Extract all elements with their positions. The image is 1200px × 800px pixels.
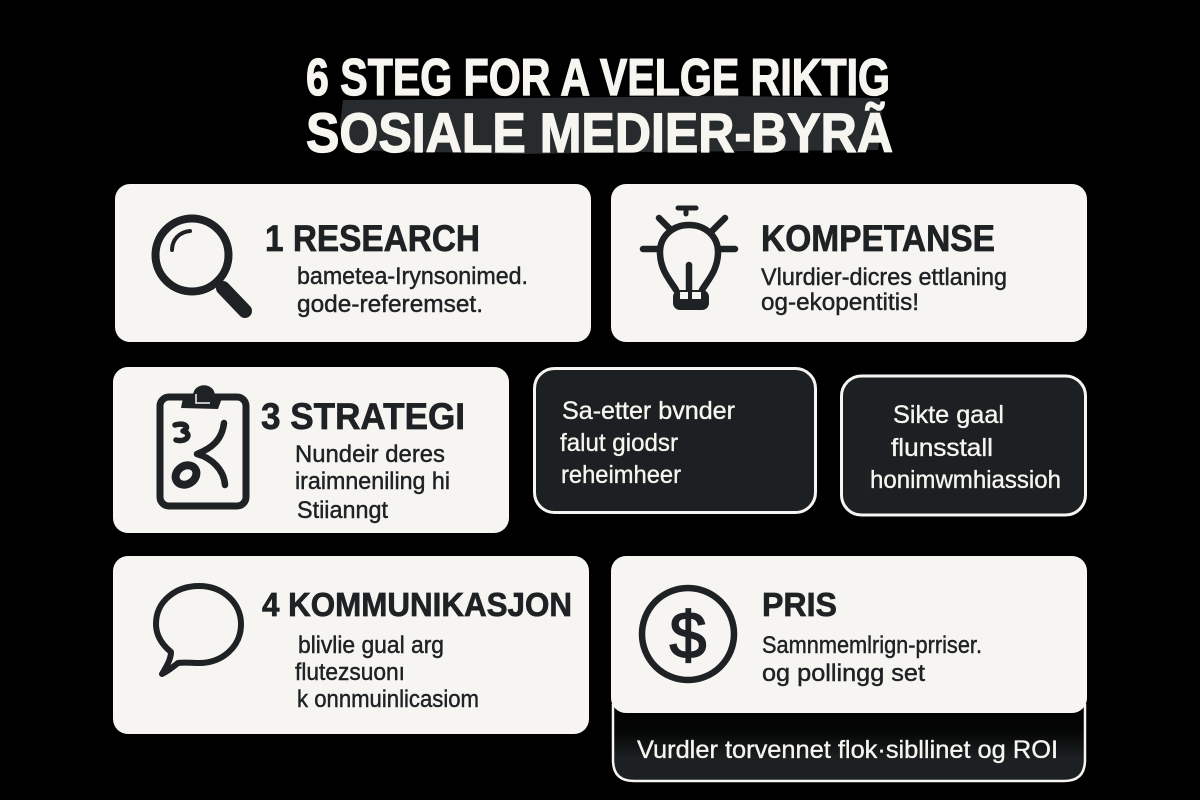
panel: dark note 2: flunsstall [891, 434, 993, 462]
text block: Samnmemlrign-prriser. [762, 632, 982, 659]
text block: Nundeir deres [295, 441, 445, 468]
text block: bametea-Irynsonimed. [297, 263, 528, 290]
text block: iraimneniling hi [295, 468, 450, 495]
text block: k onnmuinlicasiom [297, 686, 479, 713]
title [306, 49, 893, 164]
icon: dollar coin: $ [670, 598, 706, 672]
text block [297, 263, 528, 318]
text block: blivlie gual arg [298, 632, 444, 659]
text block: og-ekopentitis! [761, 289, 919, 316]
panel: dark note 1 [534, 368, 816, 512]
icon: light bulb [643, 208, 735, 310]
title: SOSIALE MEDIER-BYRÃ [306, 101, 893, 164]
text block: Stiianngt [297, 497, 388, 524]
heading: KOMPETANSE [761, 218, 995, 259]
panel: kommunikasjon [113, 556, 589, 734]
text block [295, 632, 479, 713]
title: 6 STEG FOR A VELGE RIKTIG [306, 49, 890, 107]
panel: research [115, 184, 591, 342]
panel: dark note 2 [842, 376, 1086, 515]
text block: gode-referemset. [297, 291, 483, 318]
icon: speech bubble [156, 586, 241, 674]
icon: clipboard [160, 385, 246, 506]
panel: pris [611, 556, 1087, 713]
text block: flutezsuonı [295, 659, 405, 686]
text block [761, 264, 1007, 316]
icon: dollar coin [642, 588, 734, 680]
panel: dark note 2: Sikte gaal [893, 401, 1004, 429]
icon: magnifying glass [156, 218, 245, 311]
panel: dark note 1: reheimheer [561, 461, 681, 489]
text block: Vlurdier-dicres ettlaning [761, 264, 1007, 291]
panel: dark note 1: Sa-etter bvnder [562, 397, 735, 425]
heading: 1 RESEARCH [265, 218, 480, 259]
heading: PRIS [762, 586, 837, 623]
heading: 4 KOMMUNIKASJON [262, 586, 572, 623]
panel: strategi [113, 367, 509, 533]
panel: ROI note: Vurdler torvennet flok·sibllinet og ROI [637, 736, 1058, 764]
panel: dark note 1: falut giodsr [560, 429, 678, 457]
panel: kompetanse [611, 184, 1087, 342]
panel: ROI note [613, 705, 1085, 781]
text block [762, 632, 982, 687]
panel: dark note 2: honimwmhiassioh [870, 466, 1061, 494]
text block [295, 441, 450, 524]
text block: og pollingg set [762, 660, 925, 687]
heading: 3 STRATEGI [261, 396, 465, 437]
